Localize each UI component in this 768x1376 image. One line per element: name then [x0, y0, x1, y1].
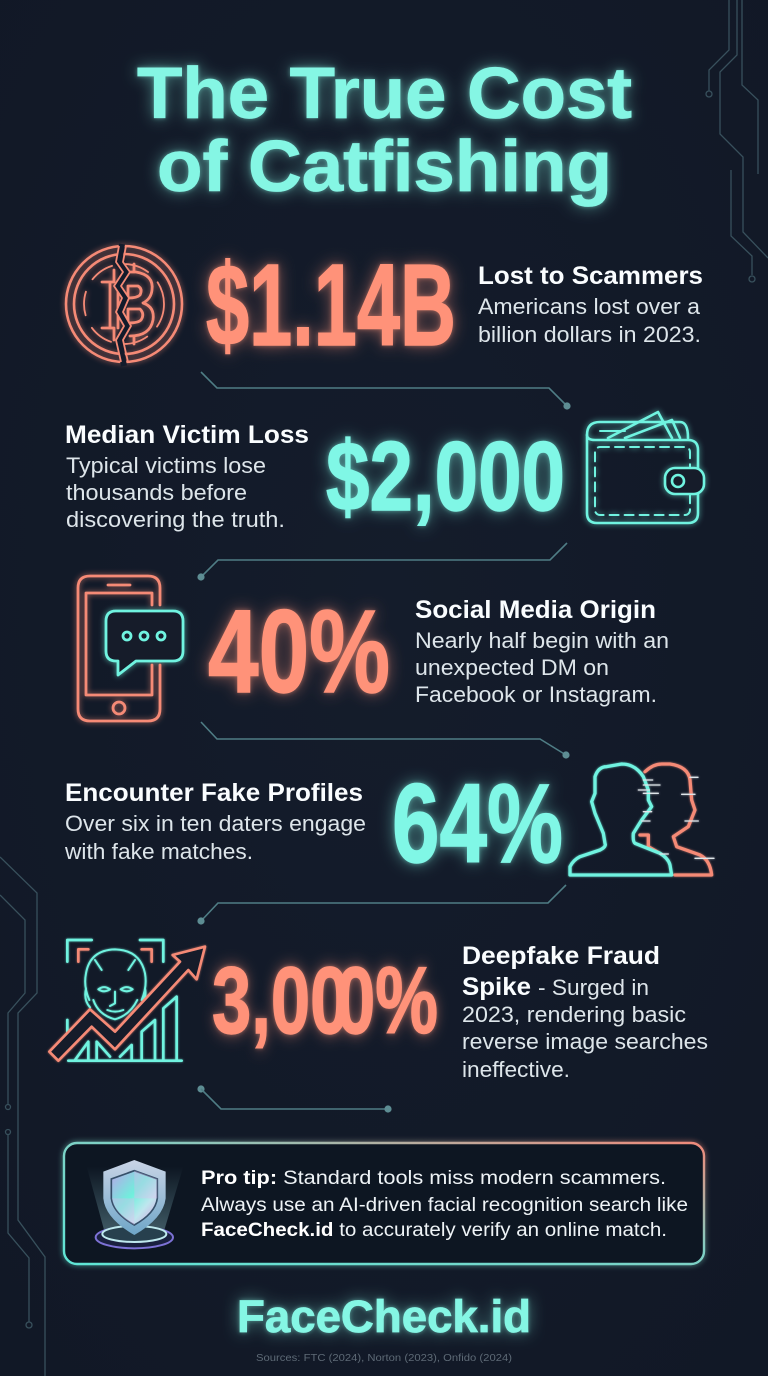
text: encounter fake profiles: Encounter Fake Profiles [65, 779, 363, 807]
icon: broken bitcoin coin [66, 244, 182, 366]
connector 4 [197, 885, 566, 925]
text: encounter fake profiles: with fake matches. [64, 839, 253, 864]
text: median victim loss: Median Victim Loss [65, 421, 309, 449]
circuit traces: top right [706, 0, 768, 282]
row 5: deepfake fraud spike [49, 940, 708, 1082]
text: deepfake fraud spike: Deepfake Fraud [462, 942, 660, 970]
text: lost to scammers: billion dollars in 2023. [478, 322, 701, 347]
pro tip text [201, 1168, 688, 1241]
panel: pro tip [64, 1143, 704, 1264]
text: median victim loss: discovering the truth. [66, 507, 285, 532]
text: median victim loss: Typical victims lose [66, 453, 266, 478]
text: lost to scammers: Americans lost over a [478, 294, 701, 319]
stat: 3,000%: 3,000% [212, 947, 438, 1053]
text: deepfake fraud spike [462, 942, 708, 1082]
pro tip text: Always use an AI-driven facial recognition search like [201, 1195, 688, 1216]
stat: $2,000: $2,000 [326, 421, 565, 531]
row 4: encounter fake profiles [64, 761, 714, 886]
text: median victim loss [65, 421, 309, 532]
title: of Catfishing [157, 127, 612, 207]
row 3: social media origin [78, 576, 669, 721]
text: deepfake fraud spike: reverse image searches [462, 1029, 708, 1054]
pro tip text: FaceCheck.id to accurately verify an online match. [201, 1220, 667, 1241]
circuit traces: bottom left [0, 857, 45, 1376]
stat: $1.14B: $1.14B [206, 240, 456, 370]
text: social media origin: Facebook or Instagram. [415, 682, 657, 707]
stat: 40%: 40% [208, 586, 390, 718]
text: encounter fake profiles [64, 779, 366, 864]
text: social media origin: unexpected DM on [415, 655, 609, 680]
icon: deepfake face with rising arrow [49, 940, 205, 1061]
title: The True Cost [137, 54, 632, 134]
text: social media origin: Nearly half begin with an [415, 628, 669, 653]
connector 1 [201, 372, 571, 410]
text: social media origin [415, 596, 669, 707]
text: deepfake fraud spike: - Surged in [538, 975, 649, 1000]
icon: wallet [587, 412, 704, 523]
sources: Sources: FTC (2024), Norton (2023), Onfido (2024) [256, 1352, 512, 1364]
brand: FaceCheck.id: FaceCheck.id [237, 1291, 531, 1342]
row 1: lost to scammers [66, 240, 703, 370]
text: deepfake fraud spike: ineffective. [462, 1057, 570, 1082]
connector 2 [197, 543, 567, 581]
title [137, 54, 632, 207]
connector 5 [197, 1085, 392, 1113]
connector 3 [201, 722, 570, 759]
icon: glitched profile silhouettes [570, 764, 714, 875]
text: deepfake fraud spike: Spike [462, 973, 531, 1001]
text: encounter fake profiles: Over six in ten daters engage [65, 811, 366, 836]
panel border [64, 1143, 704, 1264]
text: social media origin: Social Media Origin [415, 596, 656, 624]
icon: holographic shield [87, 1160, 183, 1248]
text: median victim loss: thousands before [66, 480, 247, 505]
text: lost to scammers: Lost to Scammers [478, 262, 703, 290]
text: deepfake fraud spike: 2023, rendering basic [462, 1002, 686, 1027]
pro tip text: Pro tip: Standard tools miss modern scammers. [201, 1168, 666, 1189]
stat: 64%: 64% [392, 761, 563, 886]
text: lost to scammers [478, 262, 703, 347]
icon: phone with chat bubble [78, 576, 183, 721]
row 2: median victim loss [65, 412, 704, 532]
